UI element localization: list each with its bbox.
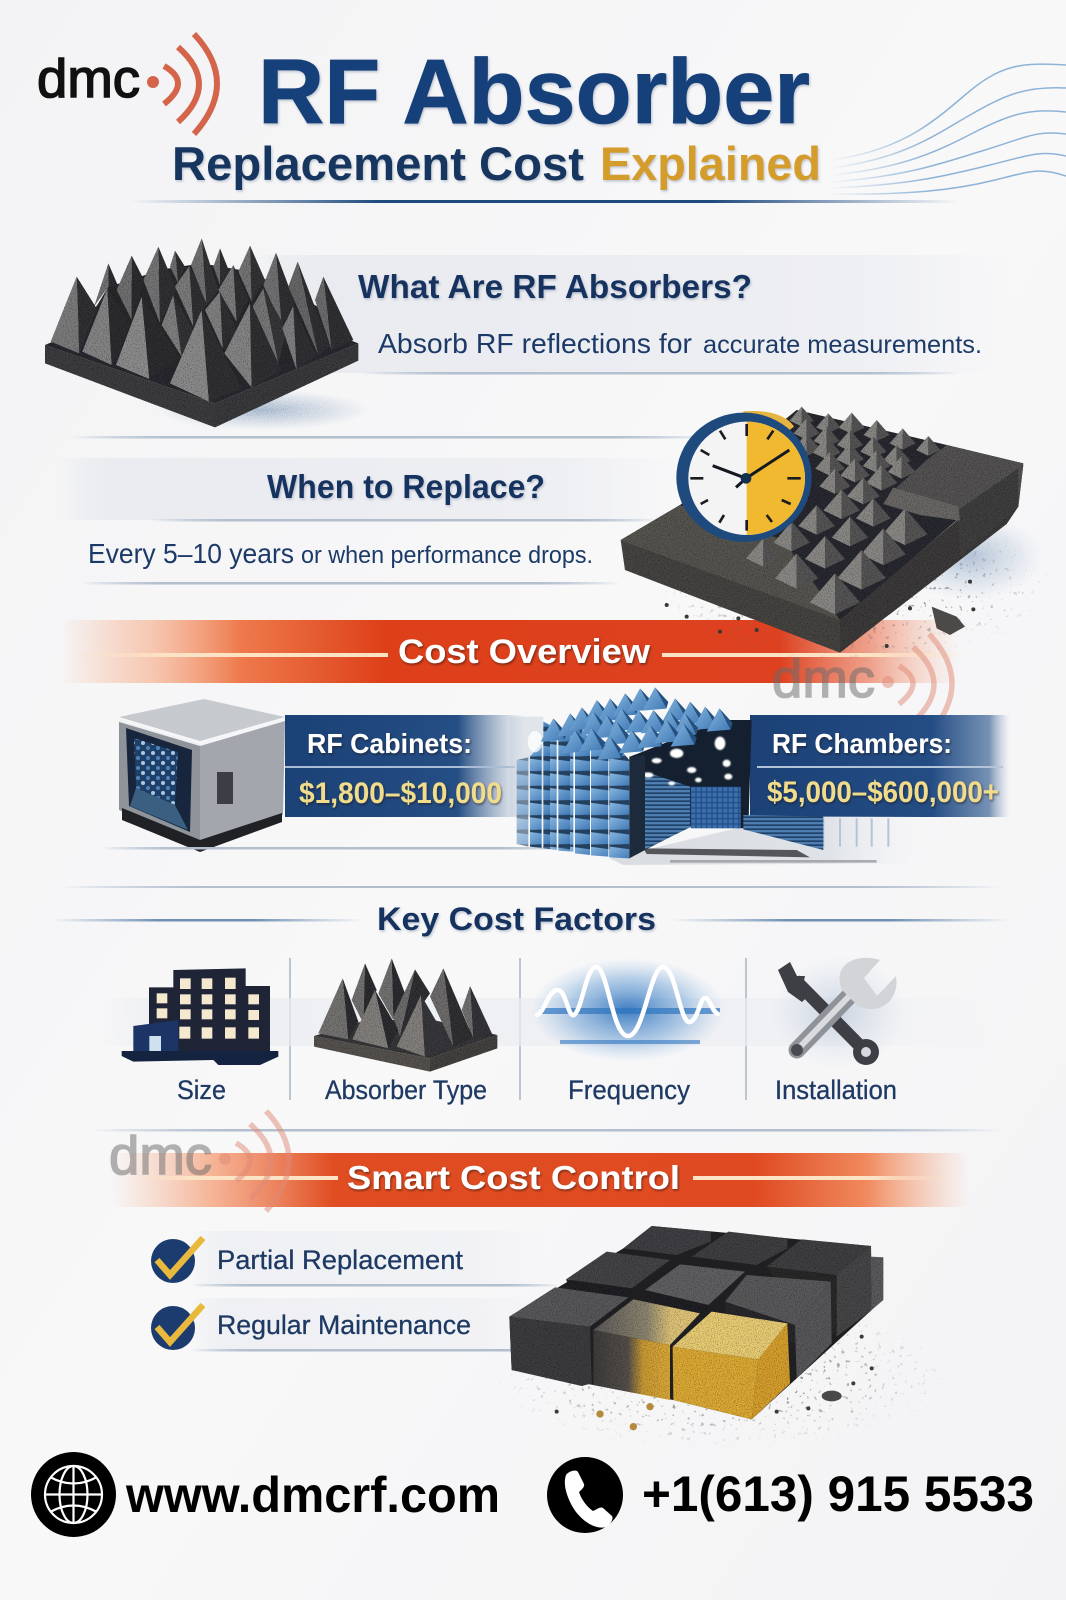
list: regular maintenance: Regular Maintenance — [217, 1310, 471, 1340]
panel: RF cabinets: RF Cabinets: — [307, 728, 472, 759]
title: RF Absorber — [258, 41, 810, 143]
watermark logo: upper: dmc — [772, 649, 875, 709]
panel: RF chambers: $5,000–$600,000+ — [767, 776, 999, 809]
factor: installation — [770, 956, 906, 1105]
illustration: anechoic chamber — [510, 687, 923, 865]
watermark logo: lower: dmc — [109, 1126, 212, 1186]
icon: tools — [770, 956, 906, 1068]
text: absorb RF reflections — [378, 328, 982, 359]
icon: globe — [31, 1452, 116, 1537]
heading: key cost factors: Key Cost Factors — [377, 901, 656, 937]
banner: smart cost control: Smart Cost Control — [347, 1159, 680, 1196]
icon: phone — [547, 1457, 623, 1533]
title — [172, 41, 821, 190]
contact: website — [31, 1452, 500, 1537]
watermark logo: upper — [772, 634, 952, 734]
text: replacement interval: Every 5–10 years — [88, 538, 294, 569]
list: partial replacement — [151, 1231, 560, 1286]
illustration: pyramidal absorber — [45, 238, 370, 430]
text: absorb RF reflections: Absorb RF reflections for — [378, 328, 692, 359]
debris dust near blocks — [490, 1300, 950, 1450]
debris — [557, 1337, 872, 1412]
icon: check — [151, 1238, 203, 1283]
interior — [630, 720, 752, 850]
debris — [667, 582, 973, 646]
illustration: absorber blocks — [509, 1226, 883, 1427]
icon: RF cabinet — [119, 699, 285, 852]
title: Replacement Cost — [172, 137, 584, 190]
decorative waves — [832, 64, 1066, 194]
watermark logo: lower — [109, 1111, 289, 1211]
banner: cost overview — [60, 620, 970, 683]
panel: RF cabinets — [285, 715, 525, 817]
factor: size — [122, 968, 278, 1105]
arch wedges — [541, 718, 567, 742]
text: replacement interval — [88, 538, 593, 569]
banner: smart cost control — [110, 1153, 970, 1207]
debris dust near worn absorber — [655, 505, 1055, 665]
factor: frequency: Frequency — [568, 1075, 690, 1105]
text: replacement interval: or when performance drops. — [301, 542, 593, 569]
contact: phone — [547, 1457, 1034, 1533]
list: partial replacement: Partial Replacement — [217, 1245, 463, 1275]
panel: RF chambers: RF Chambers: — [772, 728, 952, 759]
banner: cost overview: Cost Overview — [398, 633, 651, 671]
panel: RF chambers — [510, 687, 1010, 865]
heading: what are RF absorbers: What Are RF Absorbers? — [358, 268, 752, 305]
logo: dmc — [37, 34, 217, 134]
factor: absorber type — [314, 958, 497, 1105]
factor: installation: Installation — [775, 1075, 897, 1105]
contact: phone: +1(613) 915 5533 — [642, 1466, 1034, 1522]
icon: clock — [676, 411, 812, 542]
panel: what are RF absorbers — [250, 255, 1010, 374]
illustration: worn absorber with clock — [621, 407, 1043, 653]
factor: frequency — [530, 958, 726, 1105]
icon: building — [122, 968, 278, 1065]
floor — [610, 817, 923, 865]
title: Explained — [600, 137, 821, 190]
list: regular maintenance — [151, 1298, 560, 1352]
contact: website: www.dmcrf.com — [125, 1467, 500, 1523]
icon: wave — [530, 958, 726, 1062]
factor: size: Size — [177, 1075, 226, 1105]
heading: when to replace: When to Replace? — [267, 468, 545, 505]
logo: dmc: dmc — [37, 49, 140, 109]
icon: absorber — [314, 958, 497, 1072]
factor: absorber type: Absorber Type — [325, 1075, 487, 1105]
icon: check — [151, 1305, 203, 1350]
panel: when to replace — [60, 458, 680, 584]
wedge wall — [517, 757, 528, 847]
text: absorb RF reflections: accurate measurements. — [703, 331, 982, 359]
panel: RF cabinets: $1,800–$10,000 — [299, 777, 502, 810]
